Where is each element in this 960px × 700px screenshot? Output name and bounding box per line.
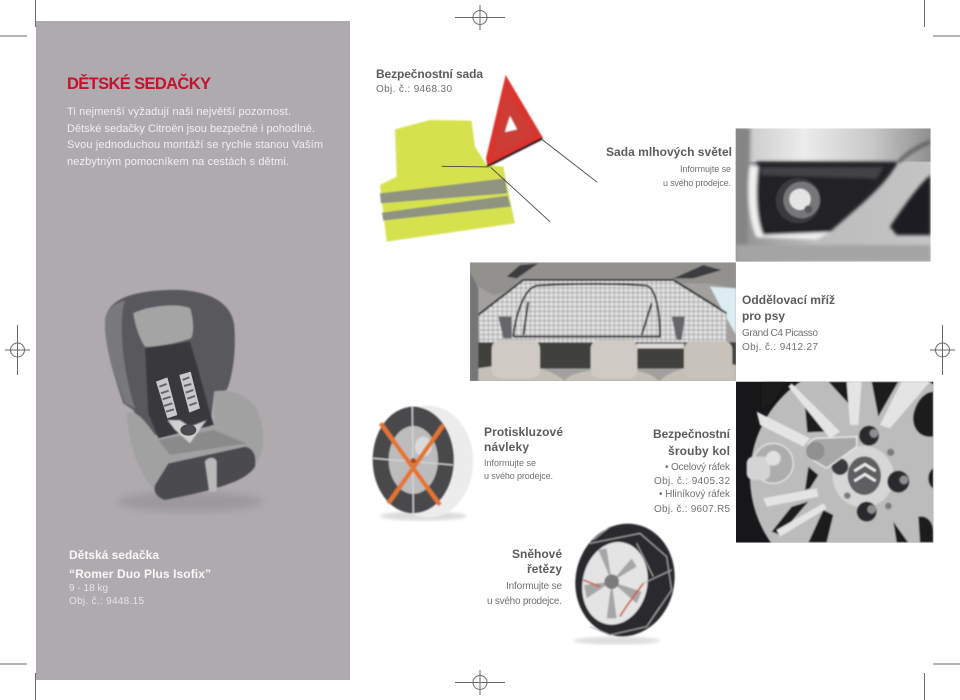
- photo: wheel with security bolts: [736, 362, 960, 592]
- caption: dog guard: Obj. č.: 9412.27: [742, 342, 818, 353]
- caption: snow chains: [487, 547, 562, 607]
- caption: wheel bolts: Bezpečnostní: [653, 427, 731, 441]
- heading: Dětské sedačky: DĚTSKÉ SEDAČKY: [67, 74, 211, 93]
- caption: child seat: “Romer Duo Plus Isofix”: [69, 567, 211, 581]
- intro text block: [67, 106, 323, 168]
- caption: child seat: 9 - 18 kg: [69, 583, 108, 594]
- caption: wheel bolts: • Hliníkový ráfek: [659, 489, 731, 500]
- caption: wheel bolts: Obj. č.: 9405.32: [654, 476, 730, 487]
- caption: anti-skid covers: Informujte se: [484, 458, 536, 468]
- caption: snow chains: Informujte se: [506, 581, 562, 592]
- caption: dog guard: [742, 293, 835, 353]
- caption: child seat: Dětská sedačka: [69, 548, 159, 562]
- photo: snow chain on wheel: [565, 514, 685, 646]
- grey side panel: [36, 21, 350, 680]
- intro text block: Svou jednoduchou montáží se rychle stanou Vaším: [67, 139, 323, 151]
- caption: safety kit: [376, 67, 483, 95]
- caption: wheel bolts: Obj. č.: 9607.R5: [654, 504, 730, 515]
- photo: anti-skid textile cover: [373, 406, 473, 521]
- caption: dog guard: pro psy: [742, 309, 785, 323]
- photo: dog guard net: [470, 262, 736, 381]
- caption: safety kit: Bezpečnostní sada: [376, 67, 483, 81]
- caption: dog guard: Oddělovací mříž: [742, 293, 835, 307]
- caption: child seat: Obj. č.: 9448.15: [69, 596, 144, 607]
- caption: wheel bolts: šrouby kol: [668, 444, 730, 458]
- caption: wheel bolts: • Ocelový ráfek: [665, 462, 731, 473]
- caption: anti-skid covers: Protiskluzové: [484, 425, 563, 439]
- intro text block: nezbytným pomocníkem na cestách s dětmi.: [67, 156, 289, 168]
- caption: snow chains: u svého prodejce.: [487, 596, 562, 607]
- caption: wheel bolts: [653, 427, 731, 515]
- photo: safety vest and warning triangle: [380, 75, 597, 242]
- photo: child car seat: [105, 290, 263, 512]
- caption: safety kit: Obj. č.: 9468.30: [376, 84, 452, 95]
- caption: fog lights: [606, 145, 732, 188]
- intro text block: Ti nejmenší vyžadují naši největší pozornost.: [67, 106, 291, 118]
- caption: child seat: [69, 548, 211, 607]
- caption: dog guard: Grand C4 Picasso: [742, 328, 818, 339]
- caption: anti-skid covers: u svého prodejce.: [484, 471, 553, 481]
- caption: snow chains: Sněhové: [512, 547, 562, 561]
- photo: fog light: [736, 128, 931, 262]
- caption: fog lights: u svého prodejce.: [663, 178, 731, 188]
- caption: fog lights: Sada mlhových světel: [606, 145, 732, 159]
- caption: snow chains: řetězy: [527, 562, 562, 576]
- caption: anti-skid covers: [484, 425, 563, 481]
- intro text block: Dětské sedačky Citroën jsou bezpečné i pohodlné.: [67, 123, 315, 135]
- caption: fog lights: Informujte se: [680, 164, 731, 174]
- caption: anti-skid covers: návleky: [484, 440, 529, 454]
